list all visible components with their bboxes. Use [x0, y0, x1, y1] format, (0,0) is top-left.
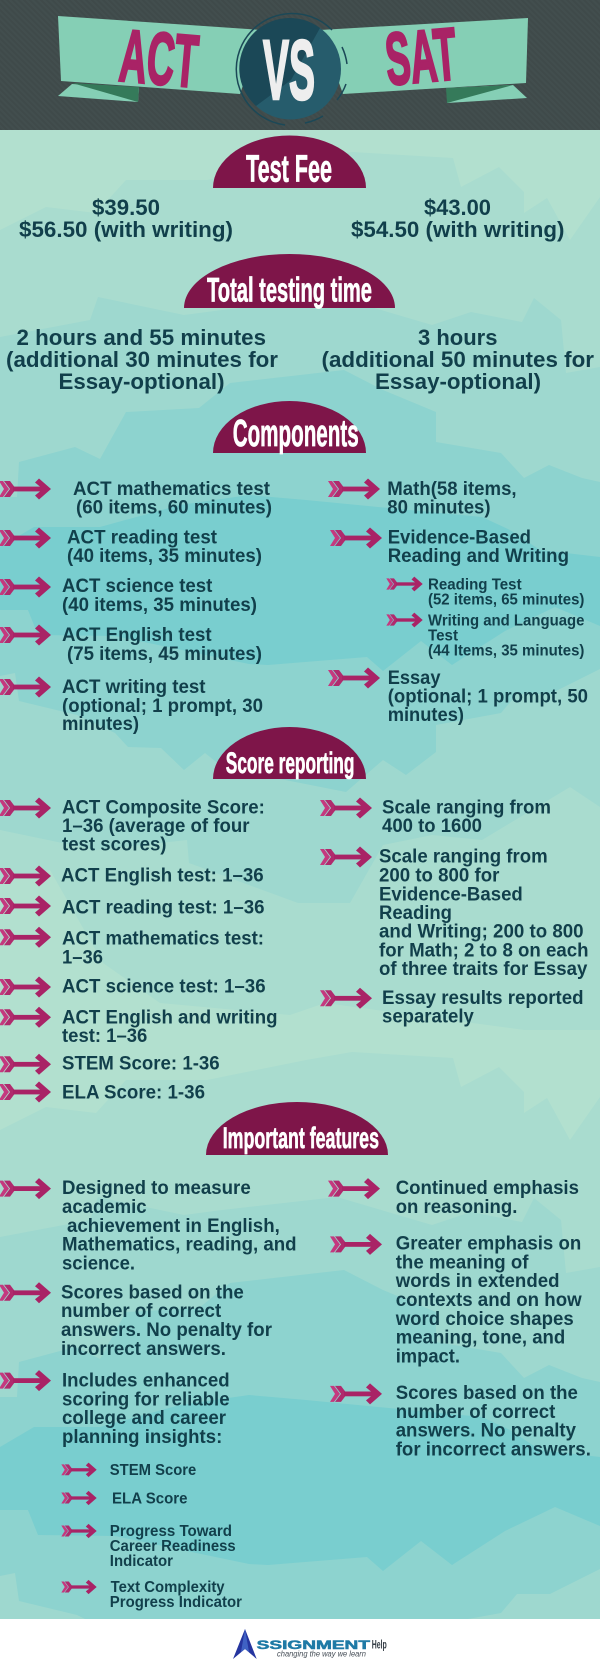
SAT math item: 80 minutes) [387, 497, 491, 519]
SAT essay item: (optional; 1 prompt, 50 [388, 686, 588, 708]
SAT reasoning item: Continued emphasis [396, 1177, 579, 1199]
SAT word meaning item: Greater emphasis on [396, 1233, 581, 1255]
SAT reasoning item [328, 1177, 579, 1218]
heading: Total testing time [184, 254, 395, 310]
ACT enhanced scoring item: planning insights: [62, 1426, 222, 1448]
ACT English item: (75 items, 45 minutes) [67, 643, 262, 665]
SAT scoring item: Scores based on the [396, 1382, 578, 1404]
ACT designed-to-measure item: Mathematics, reading, and [62, 1234, 297, 1256]
SAT section scale item: for Math; 2 to 8 on each [379, 939, 589, 961]
ACT enhanced scoring item: Includes enhanced [62, 1370, 230, 1392]
SAT scoring item: answers. No penalty [396, 1420, 576, 1442]
SAT section scale item: and Writing; 200 to 800 [379, 921, 584, 943]
ACT fee: $39.50 [92, 195, 160, 220]
SAT word meaning item [330, 1233, 582, 1368]
career readiness sub-item: Indicator [110, 1553, 173, 1570]
ACT writing item: ACT writing test [62, 676, 206, 698]
heading: Score reporting [213, 727, 366, 780]
SAT scale item: Scale ranging from [382, 796, 551, 818]
logo [233, 1629, 387, 1659]
ACT enhanced scoring item: college and career [62, 1407, 226, 1429]
heading: Components: Components [233, 413, 359, 455]
ACT enhanced scoring item [0, 1370, 230, 1448]
section: test fee [19, 136, 564, 242]
SAT word meaning item: words in extended [395, 1270, 560, 1292]
SAT essay item [328, 667, 588, 726]
ACT time [6, 325, 278, 394]
composite score item: test scores) [62, 834, 166, 856]
heading: Test Fee [213, 136, 366, 190]
composite score item: 1–36 (average of four [62, 815, 250, 837]
ACT designed-to-measure item: Designed to measure [62, 1177, 251, 1199]
text complexity sub-item: Text Complexity [111, 1579, 225, 1596]
ACT science item [0, 575, 257, 616]
header band [0, 0, 600, 130]
logo: changing the way we learn [277, 1648, 366, 1658]
ACT scoring item: Scores based on the [61, 1281, 244, 1303]
ribbon: SAT: SAT [382, 12, 460, 101]
reading score item: ACT reading test: 1–36 [62, 896, 265, 918]
SAT essay results item: separately [382, 1006, 474, 1028]
ACT scoring item: number of correct [61, 1300, 222, 1322]
SAT essay item: minutes) [388, 704, 464, 726]
SAT reading sub-item: (52 items, 65 minutes) [428, 591, 584, 608]
SAT writing sub-item [386, 613, 584, 660]
SAT essay item: Essay [388, 667, 441, 689]
heading: Important features: Important features [223, 1122, 379, 1155]
ACT reading item: ACT reading test [67, 527, 217, 549]
SAT writing sub-item: Test [428, 628, 459, 645]
ribbon: SAT [320, 12, 528, 103]
ACT English item [0, 624, 262, 665]
ACT fee: $56.50 (with writing) [19, 217, 233, 242]
heading: Important features [206, 1102, 388, 1155]
SAT essay results item: Essay results reported [382, 987, 584, 1009]
ACT time: 2 hours and 55 minutes [16, 325, 266, 350]
SAT evidence-based item: Evidence-Based [388, 527, 531, 549]
English score item: ACT English test: 1–36 [61, 865, 264, 887]
logo: SSIGNMENT [257, 1640, 370, 1652]
STEM sub-item [61, 1462, 196, 1479]
career readiness sub-item: Progress Toward [110, 1523, 232, 1540]
ACT science item: ACT science test [62, 575, 213, 597]
STEM sub-item: STEM Score [110, 1462, 196, 1479]
ACT writing item: minutes) [62, 713, 139, 735]
ELA sub-item: ELA Score [112, 1490, 188, 1507]
composite score item [0, 796, 265, 856]
SAT writing sub-item: Writing and Language [428, 613, 584, 630]
ACT science item: (40 items, 35 minutes) [62, 594, 257, 616]
section: important features [0, 1102, 591, 1611]
ACT math item: ACT mathematics test [73, 478, 270, 500]
ACT fee [19, 195, 233, 242]
SAT time: (additional 50 minutes for [322, 347, 594, 372]
SAT time: 3 hours [418, 325, 498, 350]
section: components [0, 401, 588, 735]
ACT enhanced scoring item: scoring for reliable [62, 1388, 230, 1410]
English and writing score item: test: 1–36 [62, 1025, 147, 1047]
SAT word meaning item: meaning, tone, and [396, 1327, 565, 1349]
ACT math item: (60 items, 60 minutes) [76, 497, 272, 519]
ACT time: Essay-optional) [58, 369, 224, 394]
ACT writing item [0, 676, 263, 735]
SAT math item: Math(58 items, [387, 478, 517, 500]
ribbon: ACT: ACT [116, 14, 201, 103]
English and writing score item: ACT English and writing [62, 1006, 278, 1028]
SAT evidence-based item [330, 527, 569, 567]
STEM score item: STEM Score: 1-36 [62, 1053, 220, 1075]
SAT scale item [320, 796, 551, 837]
SAT word meaning item: the meaning of [396, 1251, 529, 1273]
SAT section scale item: Evidence-Based [379, 883, 523, 905]
SAT math item [328, 478, 517, 519]
SAT section scale item: of three traits for Essay [379, 958, 588, 980]
STEM score item [0, 1053, 220, 1075]
SAT scoring item: number of correct [396, 1401, 556, 1423]
SAT time: Essay-optional) [375, 369, 541, 394]
ACT time: (additional 30 minutes for [6, 347, 278, 372]
SAT word meaning item: contexts and on how [396, 1289, 582, 1311]
ACT scoring item [0, 1281, 272, 1360]
SAT evidence-based item: Reading and Writing [388, 545, 569, 567]
ACT designed-to-measure item: achievement in English, [67, 1215, 280, 1237]
text complexity sub-item: Progress Indicator [110, 1594, 242, 1611]
SAT scoring item: for incorrect answers. [396, 1438, 591, 1460]
science score item: ACT science test: 1–36 [62, 976, 266, 998]
heading: Components [213, 401, 366, 455]
SAT word meaning item: impact. [396, 1346, 460, 1368]
ACT writing item: (optional; 1 prompt, 30 [62, 695, 263, 717]
SAT section scale item: Reading [379, 902, 452, 924]
SAT section scale item: Scale ranging from [379, 846, 548, 868]
ribbon: ACT [58, 14, 262, 103]
SAT fee: $43.00 [424, 195, 491, 220]
ACT designed-to-measure item: academic [62, 1196, 147, 1218]
SAT fee [351, 195, 564, 242]
heading: Total testing time: Total testing time [207, 272, 372, 310]
VS badge [236, 13, 347, 125]
SAT essay results item [320, 987, 584, 1028]
SAT reasoning item: on reasoning. [396, 1196, 517, 1218]
SAT writing sub-item: (44 Items, 35 minutes) [428, 643, 584, 660]
ACT reading item: (40 items, 35 minutes) [67, 545, 262, 567]
SAT scoring item [330, 1382, 591, 1460]
ACT scoring item: answers. No penalty for [61, 1319, 272, 1341]
mathematics score item: ACT mathematics test: [62, 928, 264, 950]
SAT fee: $54.50 (with writing) [351, 217, 564, 242]
SAT reading sub-item: Reading Test [428, 576, 522, 593]
ACT reading item [0, 527, 262, 567]
SAT section scale item: 200 to 800 for [379, 865, 500, 887]
ACT designed-to-measure item: science. [62, 1252, 135, 1274]
VS badge: VS [263, 23, 315, 117]
SAT section scale item [320, 846, 589, 980]
SAT word meaning item: word choice shapes [395, 1308, 574, 1330]
footer [0, 1619, 600, 1666]
English and writing score item [0, 1006, 278, 1047]
ACT math item [0, 478, 272, 519]
logo: Help [372, 1640, 387, 1652]
ACT English item: ACT English test [62, 624, 212, 646]
SAT time [322, 325, 594, 394]
mathematics score item [0, 927, 264, 968]
career readiness sub-item [61, 1523, 236, 1570]
ELA score item: ELA Score: 1-36 [62, 1082, 205, 1104]
ACT scoring item: incorrect answers. [61, 1338, 226, 1360]
heading: Test Fee: Test Fee [246, 148, 332, 190]
SAT reading sub-item [386, 576, 584, 608]
SAT scale item: 400 to 1600 [382, 815, 482, 837]
section: score reporting [0, 727, 589, 1104]
text complexity sub-item [61, 1579, 242, 1611]
career readiness sub-item: Career Readiness [110, 1538, 236, 1555]
mathematics score item: 1–36 [62, 946, 103, 968]
ELA score item [0, 1082, 205, 1104]
section: total testing time [6, 254, 594, 394]
ACT designed-to-measure item [0, 1177, 297, 1274]
composite score item: ACT Composite Score: [62, 796, 265, 818]
heading: Score reporting: Score reporting [226, 747, 354, 780]
ELA sub-item [61, 1490, 188, 1507]
